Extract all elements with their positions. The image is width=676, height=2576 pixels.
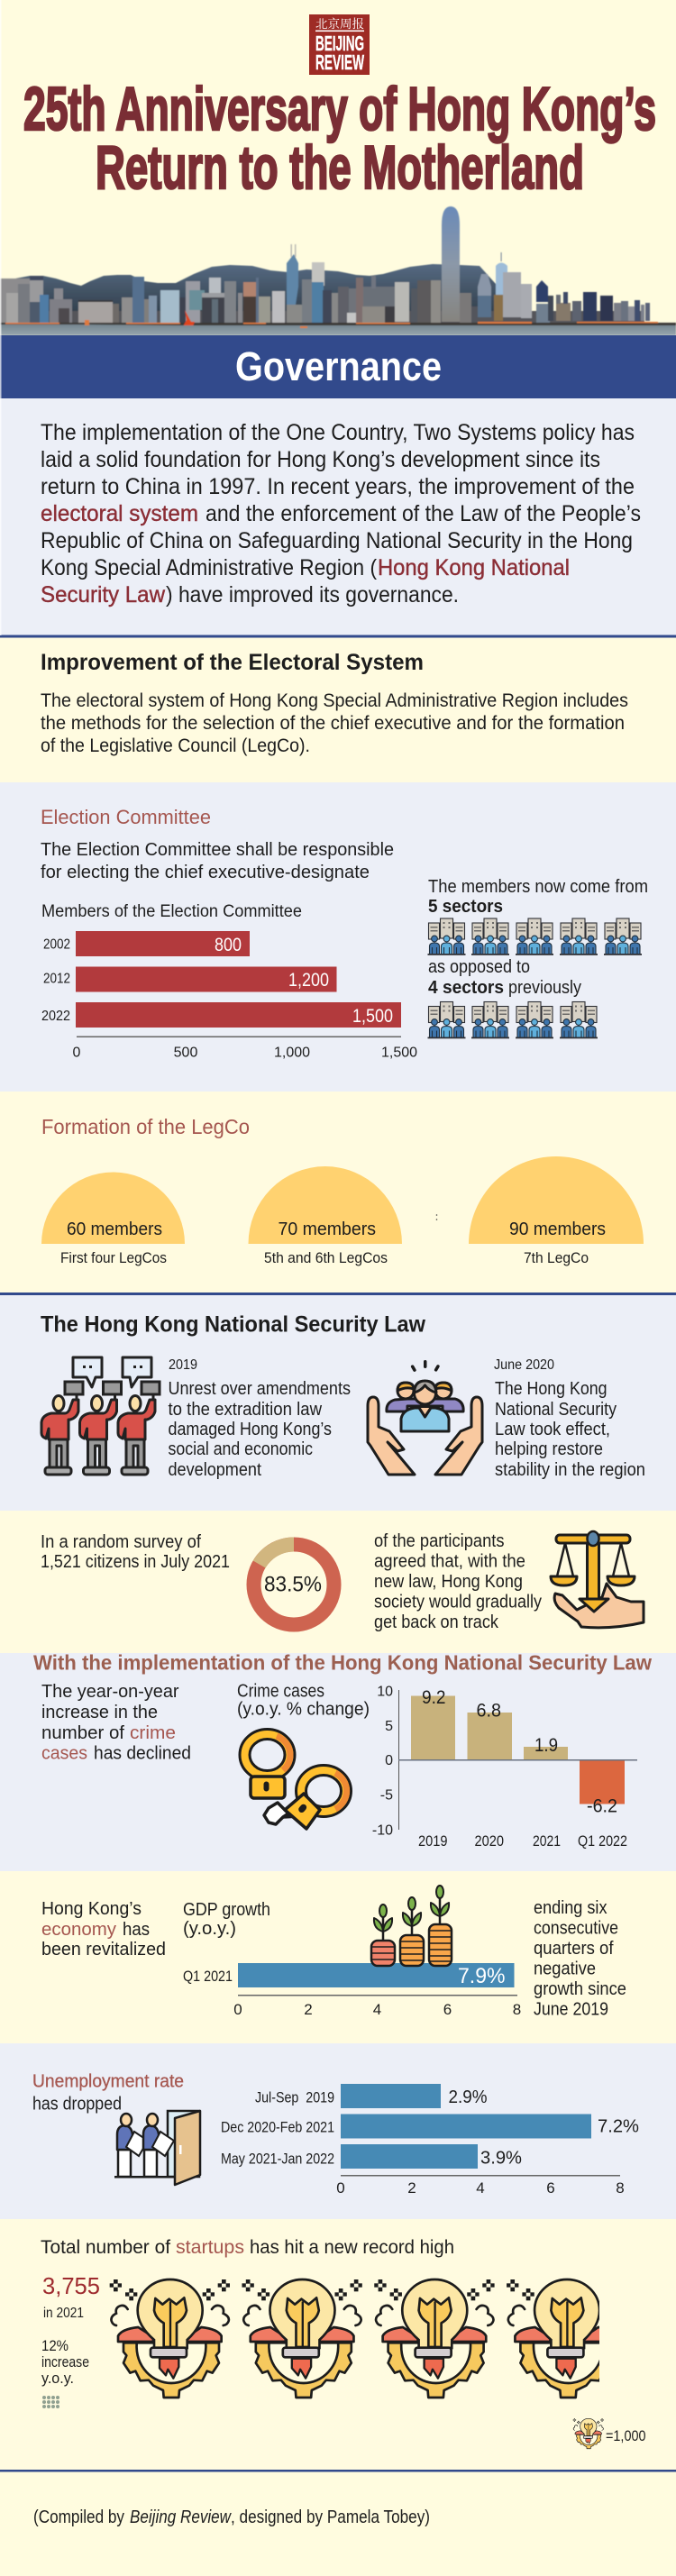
icon: scales of justice in hand [551, 1531, 644, 1628]
text: 2019 unrest: development [168, 1460, 261, 1480]
panel: introduction: and the enforcement of the Law of the People’s [206, 501, 641, 526]
panel: introduction: Security Law [41, 582, 166, 607]
bar chart: crime cases y.o.y. change: 2020 [474, 1832, 504, 1850]
chart title: crime cases: Crime cases [237, 1682, 324, 1702]
dome: 70 members: 5th and 6th LegCos [264, 1249, 388, 1266]
bar chart: unemployment rate: May 2021-Jan 2022 [221, 2151, 334, 2167]
chart title: GDP growth [183, 1900, 270, 1939]
text: survey result: new law, Hong Kong [374, 1572, 523, 1592]
icon: handcuffs [245, 1734, 347, 1829]
text: 2019 unrest: 2019 [169, 1357, 197, 1373]
text: economy revitalized [41, 1898, 166, 1959]
text: survey result [374, 1531, 542, 1632]
panel: formation of the LegCo [0, 1092, 676, 1293]
text: unemployment rate dropped: Unemployment rate [32, 2071, 184, 2091]
skyline of Hong Kong [0, 206, 676, 335]
heading: election committee: Election Committee [41, 806, 211, 828]
dome: 60 members: First four LegCos [60, 1249, 167, 1266]
stat: 12% increase: y.o.y. [41, 2370, 74, 2387]
panel: improvement of the electoral system: the methods for the selection of the chief executive and for the formation [41, 713, 625, 734]
dome: 90 members [469, 1156, 644, 1266]
banner: Governance: Governance [235, 343, 442, 389]
text: 2019 unrest [168, 1357, 351, 1480]
bar chart: unemployment rate: 3.9% [480, 2149, 522, 2169]
dome: 60 members: 60 members [67, 1219, 162, 1239]
text: ending negative growth: quarters of [534, 1938, 614, 1959]
panel: unemployment [0, 2043, 676, 2219]
dome: 70 members: 70 members [278, 1219, 376, 1239]
bar chart: crime cases y.o.y. change: -6.2 [587, 1795, 617, 1817]
text: survey intro: In a random survey of [41, 1532, 201, 1552]
bar chart: unemployment rate: 2.9% [449, 2087, 488, 2107]
text: crime cases declined: The year-on-year [41, 1681, 179, 1702]
icons: five sectors [427, 918, 642, 955]
bar chart: unemployment rate: 7.2% [598, 2116, 639, 2136]
panel: introduction: Kong Special Administrative Region ( [41, 555, 378, 580]
divider line [0, 1293, 676, 1295]
panel: introduction: Hong Kong National [378, 555, 570, 580]
bar chart: members of the election committee: 1,500 [352, 1006, 393, 1027]
text: 2019 unrest: damaged Hong Kong’s [168, 1420, 332, 1439]
text: responsibility: for electing the chief executive-designate [41, 862, 370, 882]
bar chart: GDP growth: 4 [373, 2001, 381, 2018]
text: June 2020 law [494, 1357, 645, 1480]
heading: startups: startups [176, 2237, 244, 2258]
chart title: GDP growth: (y.o.y.) [183, 1919, 236, 1939]
panel: improvement of the electoral system [0, 638, 676, 782]
donut chart: 83.5% [254, 1545, 333, 1624]
bar chart: members of the election committee: 2002 [43, 937, 70, 952]
text: economy revitalized: has [123, 1919, 150, 1940]
logo: Beijing Review: BEIJING [315, 32, 364, 55]
icon: coin stacks with sprouts [371, 1886, 452, 1966]
logo: Beijing Review: REVIEW [315, 50, 364, 74]
panel: improvement of the electoral system: of the Legislative Council (LegCo). [41, 735, 310, 756]
text: ending negative growth: negative [534, 1958, 596, 1979]
bar chart: unemployment rate: Dec 2020-Feb 2021 [221, 2118, 334, 2136]
panel: startups [41, 2239, 645, 2450]
donut chart: 83.5%: 83.5% [264, 1572, 322, 1597]
legend: bulb equals 1,000: =1,000 [606, 2427, 645, 2444]
panel: introduction: electoral system [41, 501, 198, 526]
bar chart: members of the election committee: 2022 [41, 1009, 70, 1024]
bar chart: crime cases y.o.y. change [372, 1684, 637, 1850]
icon: protesters with speech bubbles [41, 1357, 160, 1475]
bar chart: crime cases y.o.y. change: 2019 [418, 1832, 447, 1850]
text: crime cases declined [41, 1681, 191, 1763]
heading: formation of the LegCo: Formation of the LegCo [41, 1115, 250, 1138]
bar chart: unemployment rate [221, 2084, 639, 2197]
sectors comparison: The members now come from [428, 877, 648, 897]
heading: startups [41, 2237, 454, 2258]
bar chart: unemployment rate: 2 [407, 2179, 416, 2197]
sectors comparison [427, 877, 648, 1038]
panel: crime cases [0, 1651, 676, 1871]
text: June 2020 law: stability in the region [495, 1460, 645, 1480]
text: 2019 unrest: Unrest over amendments [168, 1379, 351, 1399]
text: survey result: of the participants [374, 1531, 505, 1551]
bar chart: unemployment rate: 8 [616, 2179, 625, 2197]
heading: with the implementation: With the implementation of the Hong Kong National Security Law [33, 1651, 652, 1675]
sectors comparison: 5 sectors [428, 897, 503, 917]
panel: improvement of the electoral system: Improvement of the Electoral System [41, 650, 424, 675]
title [23, 75, 656, 202]
icon: hands holding people [368, 1360, 482, 1475]
text: survey intro: 1,521 citizens in July 2021 [41, 1552, 230, 1572]
bar chart: GDP growth: 2 [304, 2001, 313, 2018]
credit: (Compiled by [33, 2507, 124, 2527]
text: economy revitalized: economy [41, 1919, 117, 1940]
dome: 60 members [41, 1172, 185, 1266]
text: ending negative growth: growth since [534, 1978, 626, 1999]
bar chart: members of the election committee: 1,000 [274, 1046, 310, 1060]
panel: introduction: laid a solid foundation for Hong Kong’s development since its [41, 447, 600, 472]
panel: introduction: The implementation of the One Country, Two Systems policy has [41, 420, 635, 445]
bar chart: unemployment rate: 4 [476, 2179, 485, 2197]
stat: 3,755 in 2021 [42, 2272, 100, 2321]
bar chart: members of the election committee: 1,500 [381, 1046, 417, 1060]
credit: , designed by Pamela Tobey) [231, 2507, 430, 2527]
panel: improvement of the electoral system: The electoral system of Hong Kong Special Administrative Region includes [41, 690, 628, 711]
bar chart: unemployment rate: 6 [546, 2179, 555, 2197]
text: crime cases declined: cases [41, 1743, 87, 1763]
bar chart: crime cases y.o.y. change: Q1 2022 [578, 1832, 627, 1850]
left edge strip [0, 0, 2, 635]
bar chart: GDP growth: 7.9% [458, 1964, 505, 1988]
stat: 12% increase [41, 2337, 89, 2387]
text: economy revitalized: Hong Kong’s [41, 1898, 142, 1919]
bar chart: GDP growth: 8 [513, 2001, 521, 2018]
text: June 2020 law: National Security [495, 1400, 617, 1420]
bar chart: crime cases y.o.y. change: 6.8 [476, 1700, 501, 1722]
sectors comparison: 4 sectors [428, 978, 504, 998]
text: survey result: get back on track [374, 1612, 499, 1632]
dome: 70 members [249, 1166, 402, 1266]
dot grid [42, 2396, 59, 2408]
bar chart: crime cases y.o.y. change: 5 [385, 1719, 393, 1734]
credit: Beijing Review [130, 2507, 232, 2527]
panel: economy [0, 1871, 676, 2043]
panel: the Hong Kong National Security Law [0, 1295, 676, 1511]
panel: introduction: Republic of China on Safeguarding National Security in the Hong [41, 528, 633, 553]
text: survey result: agreed that, with the [374, 1552, 525, 1572]
bar chart: crime cases y.o.y. change: 2021 [533, 1832, 561, 1850]
panel: survey [0, 1511, 676, 1653]
text: survey result: society would gradually [374, 1592, 542, 1612]
text: June 2020 law: June 2020 [494, 1357, 554, 1373]
text: ending negative growth: ending six [534, 1897, 607, 1918]
sectors comparison: previously [508, 978, 581, 998]
chart title: crime cases: (y.o.y. % change) [237, 1700, 370, 1720]
bar chart: members of the election committee: 1,200 [288, 970, 329, 991]
bar chart: crime cases y.o.y. change: 10 [377, 1684, 393, 1700]
bar chart: crime cases y.o.y. change: 9.2 [422, 1687, 445, 1708]
logo: Beijing Review [309, 14, 370, 75]
heading: national security law: The Hong Kong National Security Law [41, 1312, 426, 1338]
logo: Beijing Review: 北京周报 [315, 17, 364, 31]
text: crime cases declined: number of [41, 1722, 124, 1743]
text: unemployment rate dropped: has dropped [32, 2093, 122, 2115]
panel: introduction: return to China in 1997. In recent years, the improvement of the [41, 474, 635, 499]
stat: 3,755 in 2021: 3,755 [42, 2272, 100, 2299]
dome: 90 members: 90 members [509, 1219, 606, 1239]
stat: 12% increase: 12% [41, 2337, 69, 2354]
text: survey intro [41, 1532, 230, 1572]
chart title: GDP growth: GDP growth [183, 1900, 270, 1920]
icon: people at an open door [114, 2111, 200, 2185]
bar chart: crime cases y.o.y. change: -10 [372, 1822, 393, 1839]
sectors comparison: as opposed to [428, 957, 530, 977]
bar chart: members of the election committee: 2012 [43, 972, 70, 986]
text: crime cases declined: has declined [94, 1743, 191, 1763]
text: crime cases declined: crime [130, 1722, 176, 1743]
icons: four sectors [427, 1002, 598, 1038]
bar chart: GDP growth: 0 [233, 2001, 242, 2018]
text: ending negative growth [534, 1897, 626, 2019]
bar chart: members of the election committee: 0 [73, 1046, 81, 1060]
text: economy revitalized: been revitalized [41, 1939, 166, 1959]
bar chart: members of the election committee: 500 [174, 1046, 197, 1060]
bar chart: unemployment rate: Jul-Sep 2019 [255, 2089, 334, 2106]
chart title: crime cases [237, 1682, 370, 1720]
panel: election committee [0, 782, 676, 1092]
divider line [0, 635, 676, 638]
dome: 90 members: 7th LegCo [524, 1249, 589, 1266]
bar chart: crime cases y.o.y. change: 0 [385, 1753, 393, 1768]
credit [33, 2507, 430, 2527]
divider line [0, 2470, 676, 2471]
bar chart: crime cases y.o.y. change: -5 [380, 1788, 393, 1803]
text: crime cases declined: increase in the [41, 1702, 158, 1722]
bar chart: members of the election committee: 800 [215, 935, 242, 955]
bar chart: GDP growth: Q1 2021 [183, 1968, 233, 1985]
bar chart: crime cases y.o.y. change: 1.9 [534, 1735, 558, 1756]
bar chart: GDP growth: 6 [443, 2001, 452, 2018]
banner: Governance [0, 335, 676, 398]
text: June 2020 law: The Hong Kong [495, 1379, 607, 1399]
text: ending negative growth: consecutive [534, 1918, 618, 1938]
text: unemployment rate dropped [32, 2071, 184, 2115]
text: 2019 unrest: to the extradition law [168, 1400, 323, 1420]
text: responsibility [41, 839, 394, 882]
bar chart: members of the election committee [41, 902, 417, 1060]
pictogram: light bulbs [110, 2279, 626, 2398]
legend: bulb equals 1,000 [573, 2418, 645, 2449]
text: ending negative growth: June 2019 [534, 1999, 608, 2019]
text: June 2020 law: helping restore [495, 1439, 603, 1459]
text: June 2020 law: Law took effect, [495, 1420, 610, 1439]
bar chart: unemployment rate: 0 [336, 2179, 345, 2197]
bar chart: GDP growth [183, 1963, 521, 2018]
panel: introduction: ) have improved its governance. [166, 582, 459, 607]
bar chart: members of the election committee: Members of the Election Committee [41, 902, 302, 921]
text: responsibility: The Election Committee shall be responsible [41, 839, 394, 860]
text: 2019 unrest: social and economic [168, 1439, 313, 1459]
stat: 3,755 in 2021: in 2021 [43, 2306, 84, 2321]
panel: introduction [0, 398, 676, 635]
heading: startups: Total number of [41, 2237, 170, 2258]
stat: 12% increase: increase [41, 2353, 89, 2370]
heading: startups: has hit a new record high [250, 2237, 454, 2258]
